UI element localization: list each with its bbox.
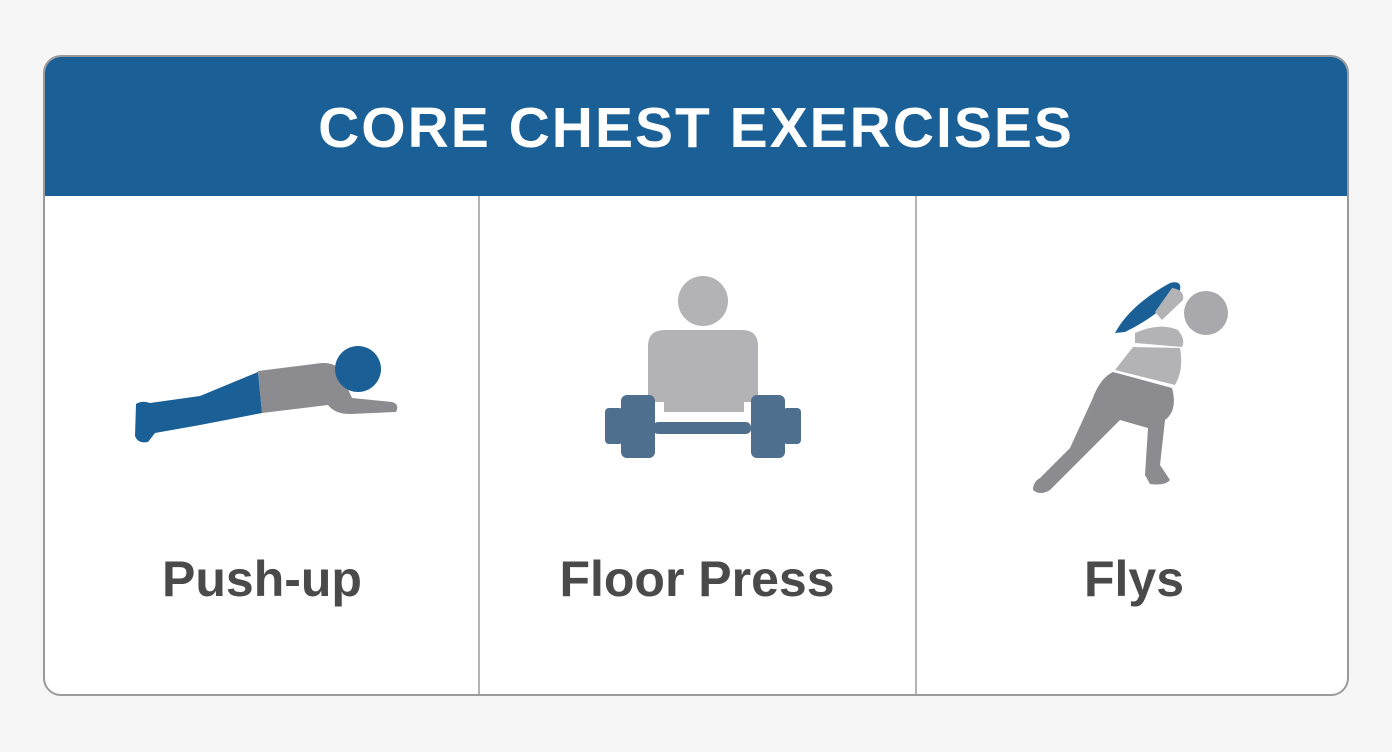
icon: floor press	[605, 276, 801, 458]
title: CORE CHEST EXERCISES	[318, 96, 1074, 160]
label: flys: Flys	[1084, 551, 1184, 607]
icon: flys	[1033, 282, 1228, 493]
card	[43, 55, 1349, 696]
icon: push-up	[135, 346, 397, 442]
title	[45, 57, 1347, 196]
label: floor press: Floor Press	[559, 551, 835, 607]
label: push-up: Push-up	[162, 551, 362, 607]
